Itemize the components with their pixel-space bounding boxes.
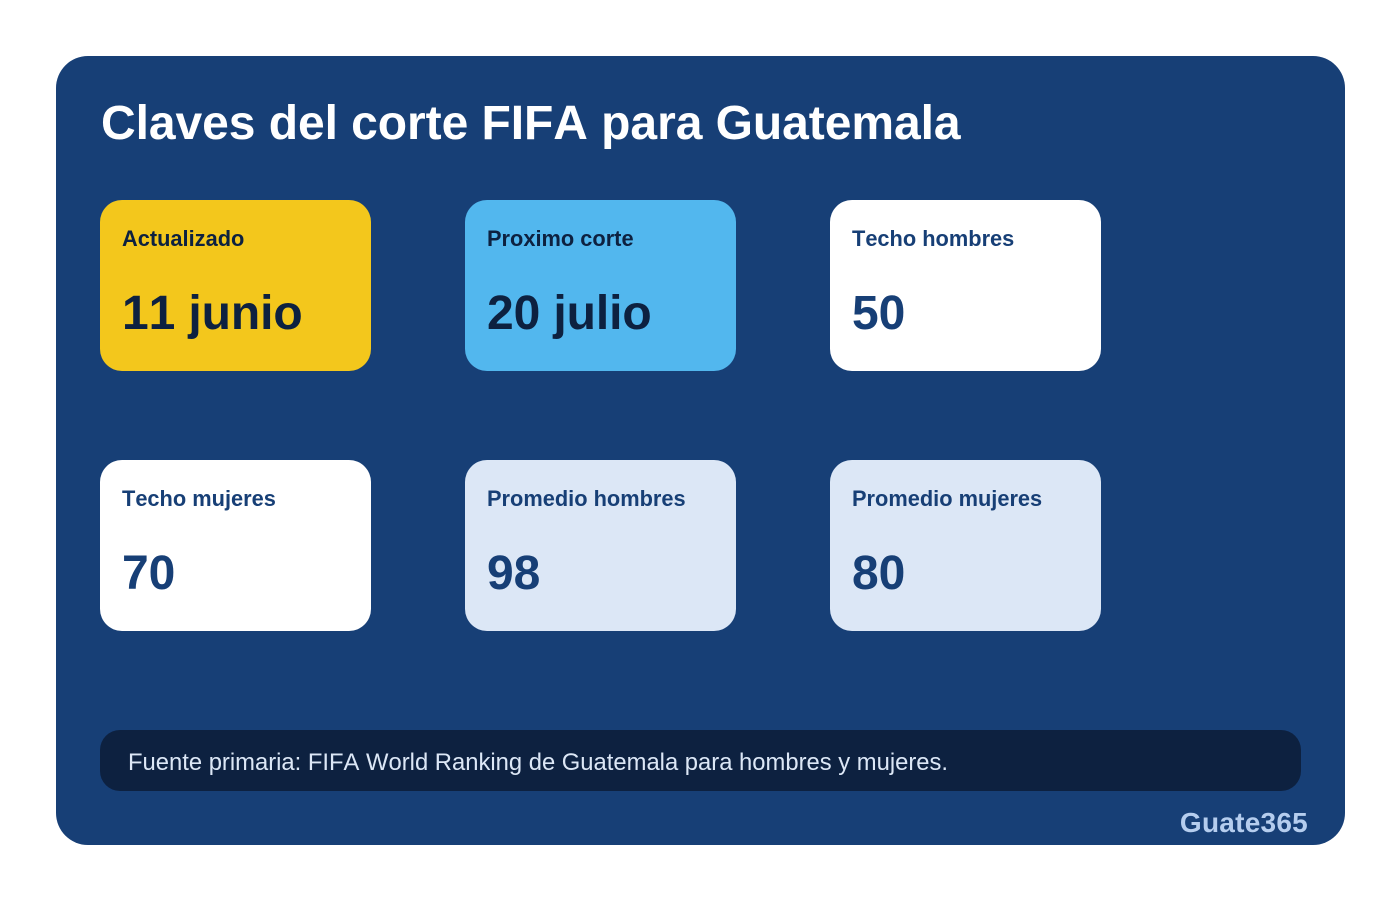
value: 98: 98 <box>487 547 540 600</box>
source bar <box>100 730 1301 791</box>
value: 11 junio: 11 junio <box>122 287 303 340</box>
label: Promedio hombres: Promedio hombres <box>487 486 686 511</box>
source text: Fuente primaria: FIFA World Ranking de Guatemala para hombres y mujeres. <box>128 749 948 776</box>
value: 70: 70 <box>122 547 175 600</box>
value: 20 julio: 20 julio <box>487 287 652 340</box>
label: Techo mujeres: Techo mujeres <box>122 486 276 511</box>
brand label: Guate365 <box>1180 807 1308 838</box>
value: 80: 80 <box>852 547 905 600</box>
card: Proximo corte <box>465 200 736 371</box>
label: Proximo corte: Proximo corte <box>487 226 634 251</box>
title: Claves del corte FIFA para Guatemala <box>101 97 960 150</box>
card: Promedio mujeres <box>830 460 1101 631</box>
label: Techo hombres: Techo hombres <box>852 226 1014 251</box>
label: Actualizado: Actualizado <box>122 226 244 251</box>
value: 50: 50 <box>852 287 905 340</box>
card: Actualizado <box>100 200 371 371</box>
card: Techo hombres <box>830 200 1101 371</box>
label: Promedio mujeres: Promedio mujeres <box>852 486 1042 511</box>
card: Promedio hombres <box>465 460 736 631</box>
card: Techo mujeres <box>100 460 371 631</box>
